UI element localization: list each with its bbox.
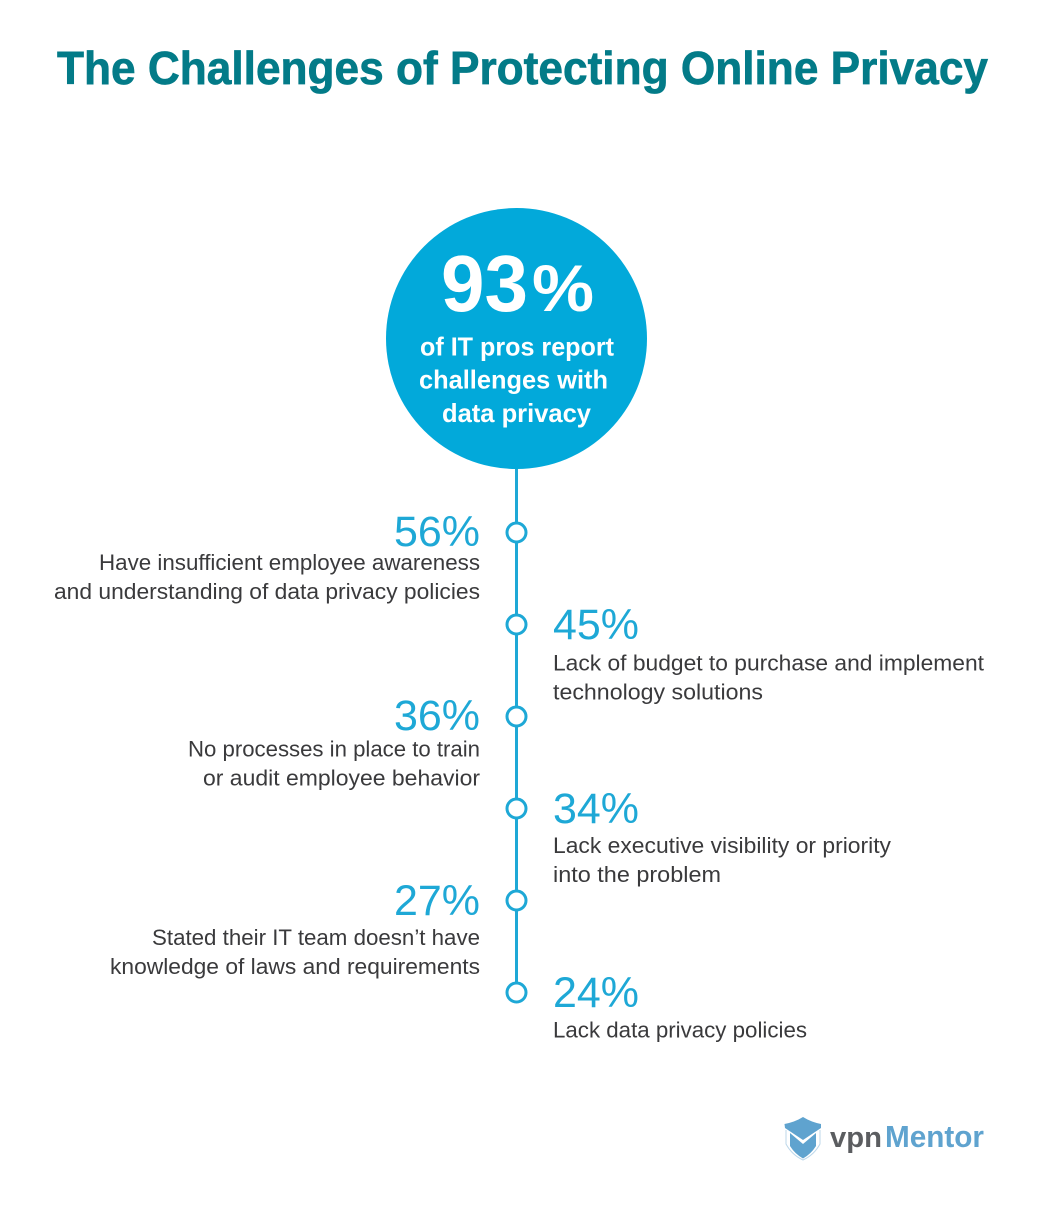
item: 27%	[110, 877, 480, 979]
item: 24%	[553, 969, 807, 1042]
hero circle: 93%	[386, 208, 647, 469]
item: 45%: technology solutions	[553, 680, 763, 704]
timeline marker 24%	[507, 983, 526, 1002]
item: 34%	[553, 785, 892, 887]
item: 45%: 45%	[553, 601, 639, 649]
item: 56%: Have insufficient employee awareness	[99, 550, 480, 575]
icon: shield	[784, 1117, 821, 1160]
hero number: %	[532, 251, 594, 325]
hero caption: of IT pros report	[420, 332, 614, 362]
timeline marker 36%	[507, 707, 526, 726]
hero caption: challenges with	[419, 364, 608, 394]
item: 45%: Lack of budget to purchase and implement	[553, 650, 985, 676]
item: 34%: into the problem	[553, 862, 721, 887]
item: 36%	[188, 692, 481, 790]
item: 34%: 34%	[553, 785, 639, 833]
item: 36%: 36%	[394, 692, 480, 740]
item: 24%: 24%	[553, 969, 639, 1017]
hero caption	[419, 332, 614, 428]
timeline marker 56%	[507, 523, 526, 542]
item: 27%: knowledge of laws and requirements	[110, 954, 480, 979]
item: 45%	[553, 601, 985, 704]
timeline marker 45%	[507, 615, 526, 634]
item: 27%: Stated their IT team doesn’t have	[152, 925, 480, 950]
timeline marker 34%	[507, 799, 526, 818]
item: 36%: No processes in place to train	[188, 736, 480, 762]
logo: vpnMentor	[784, 1117, 984, 1160]
hero caption: data privacy	[442, 398, 592, 428]
timeline line	[515, 460, 518, 992]
hero number	[441, 239, 594, 328]
hero number: 93	[441, 239, 528, 328]
item: 24%: Lack data privacy policies	[553, 1018, 807, 1042]
wordmark: Mentor	[885, 1119, 984, 1154]
wordmark: vpn	[830, 1122, 882, 1154]
title: The Challenges of Protecting Online Privacy	[57, 42, 988, 94]
item: 56%: 56%	[394, 508, 480, 556]
item: 34%: Lack executive visibility or priority	[553, 833, 892, 858]
timeline marker 27%	[507, 891, 526, 910]
item: 56%	[54, 508, 480, 604]
item: 56%: and understanding of data privacy policies	[54, 579, 480, 604]
wordmark	[830, 1119, 984, 1154]
item: 36%: or audit employee behavior	[203, 766, 481, 790]
item: 27%: 27%	[394, 877, 480, 925]
